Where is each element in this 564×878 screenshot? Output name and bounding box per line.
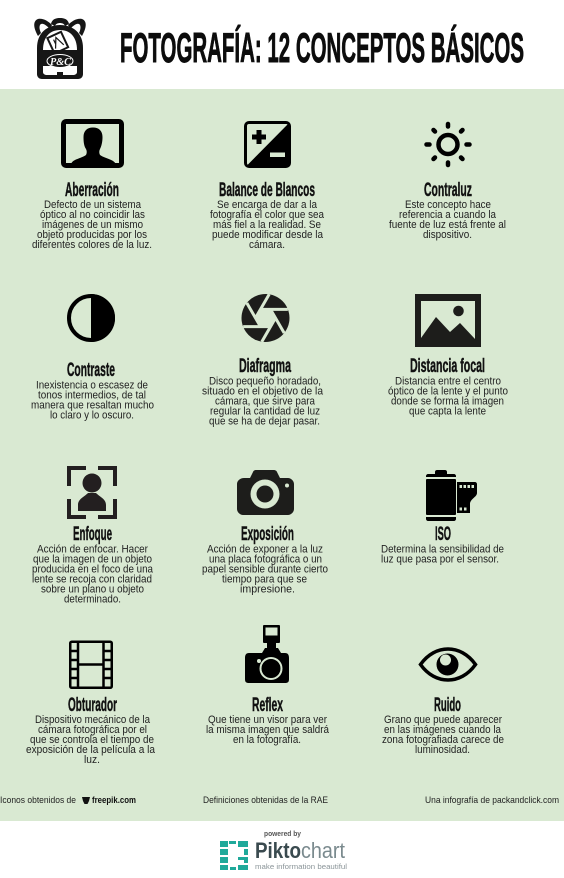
icon: focus frame with person [69,468,115,517]
description: en la fotografía. [233,734,301,746]
description [388,376,508,418]
heading: Reflex [252,694,283,716]
description: luz. [84,754,100,766]
tagline: make information beautiful [255,862,347,871]
description [389,199,506,241]
description: Determina la sensibilidad de [381,544,504,556]
icon: Piktochart mark [220,841,248,870]
icon: film canister [426,470,477,521]
panel: Exposición [202,470,328,596]
description: sobre un plano u objeto [41,584,144,596]
description: que capta la lente [409,406,486,418]
icon: portrait frame [64,122,122,166]
description: tonos intermedios, de tal [38,390,146,402]
panel: Diafragma [202,294,323,428]
heading: Aberración [65,179,119,201]
logo: backpack P&C [34,18,86,79]
description: exposición de la película a la [26,744,155,756]
heading: Distancia focal [410,355,485,377]
logo: Piktochart [220,838,347,871]
description: lente se recoja con claridad [32,574,152,586]
description: tiempo para que se [222,574,307,586]
icon: half circle [69,294,115,342]
description: Se encarga de dar a la [217,199,317,211]
description: determinado. [64,594,121,606]
description: óptico de la lente y el punto [388,386,508,398]
description: regular la cantidad de luz [210,406,320,418]
description: cámara, que sirve para [215,396,315,408]
description: manera que resaltan mucho [31,400,154,412]
panel: Contraste [31,294,154,422]
description [26,714,155,766]
description: lo claro y lo oscuro. [50,410,134,422]
description: producida en el foco de una [32,564,153,576]
freepik name: freepik.com [92,795,136,806]
description: situado en el objetivo de la [202,386,323,398]
panel: Distancia focal [388,294,508,418]
heading: Contraluz [424,179,472,201]
description: fuente de luz está frente al [389,219,506,231]
description: Grano que puede aparecer [384,714,502,726]
description: óptico al no coincidir las [40,209,146,221]
icon: camera [237,470,294,515]
description: Que tiene un visor para ver [208,714,327,726]
description: impresione. [240,584,295,596]
logo initials: P&C [50,57,71,68]
wordmark light: chart [301,838,345,863]
icon: landscape picture [415,294,481,347]
heading: Contraste [67,359,115,381]
description: Dispositivo mecánico de la [35,714,150,726]
icon: exposure compensation [246,122,290,166]
description: Disco pequeño horadado, [209,376,321,388]
description: dispositivo. [423,229,472,241]
footer: icon credit [0,795,136,806]
description: más fiel a la realidad. Se [213,219,321,231]
description: luminosidad. [415,744,470,756]
icon: film strip [70,642,112,688]
panel: ISO: ISO [435,523,451,545]
description: papel sensible durante cierto [202,564,328,576]
description: fotografía el color que sea [210,209,324,221]
description: la misma imagen que saldrá [206,724,329,736]
description: donde se forma la imagen [391,396,504,408]
panel: Enfoque [32,468,153,606]
description: luz que pasa por el sensor. [381,554,499,566]
icon: freepik mark [82,797,90,804]
icon: aperture [240,294,291,342]
panel: Balance de Blancos [210,122,324,251]
icon: eye [420,649,476,680]
panel: Reflex [206,625,329,746]
description: Inexistencia o escasez de [36,380,148,392]
description: Este concepto hace [405,199,491,211]
description: objeto producidas por los [37,229,148,241]
description [381,544,504,566]
description: en las imágenes cuando la [384,724,501,736]
description [202,376,323,428]
panel: Ruido [382,649,504,756]
powered by label: powered by [264,829,302,838]
description: una placa fotográfica o un [209,554,322,566]
heading: Enfoque [73,523,112,545]
description [206,714,329,746]
panel: Obturador [26,642,155,766]
description: imágenes de un mismo [42,219,143,231]
panel: Contraluz [389,124,506,241]
description: diferentes colores de la luz. [32,239,152,251]
description [210,199,324,251]
description: puede modificar desde la [212,229,323,241]
heading: Obturador [68,694,117,716]
description: que la imagen de un objeto [33,554,152,566]
description: Acción de exponer a la luz [207,544,323,556]
description: que se controla el tiempo de [30,734,154,746]
description: zona fotografiada carece de [382,734,504,746]
description [32,544,153,606]
description: Acción de enfocar. Hacer [37,544,148,556]
panel: Aberración [32,122,152,251]
description [31,380,154,422]
footer: definitions credit: Definiciones obtenidas de la RAE [203,795,328,805]
description: Distancia entre el centro [395,376,501,388]
description: que se ha de dejar pasar. [209,416,320,428]
heading: Diafragma [239,355,291,377]
description: Defecto de un sistema [44,199,141,211]
description: cámara fotográfica por el [38,724,147,736]
description [202,544,328,596]
icon: reflex camera with flash [245,625,289,683]
panel: Ruido: Ruido [434,694,461,716]
icon: sun [426,124,470,165]
description [32,199,152,251]
description: referencia a cuando la [399,209,496,221]
heading: Exposición [241,523,294,545]
wordmark bold: Pikto [255,838,301,863]
description [382,714,504,756]
panel: ISO [381,470,504,566]
heading: Balance de Blancos [219,179,315,201]
footer: icon credit: Iconos obtenidos de [0,795,76,805]
description: cámara. [249,239,285,251]
